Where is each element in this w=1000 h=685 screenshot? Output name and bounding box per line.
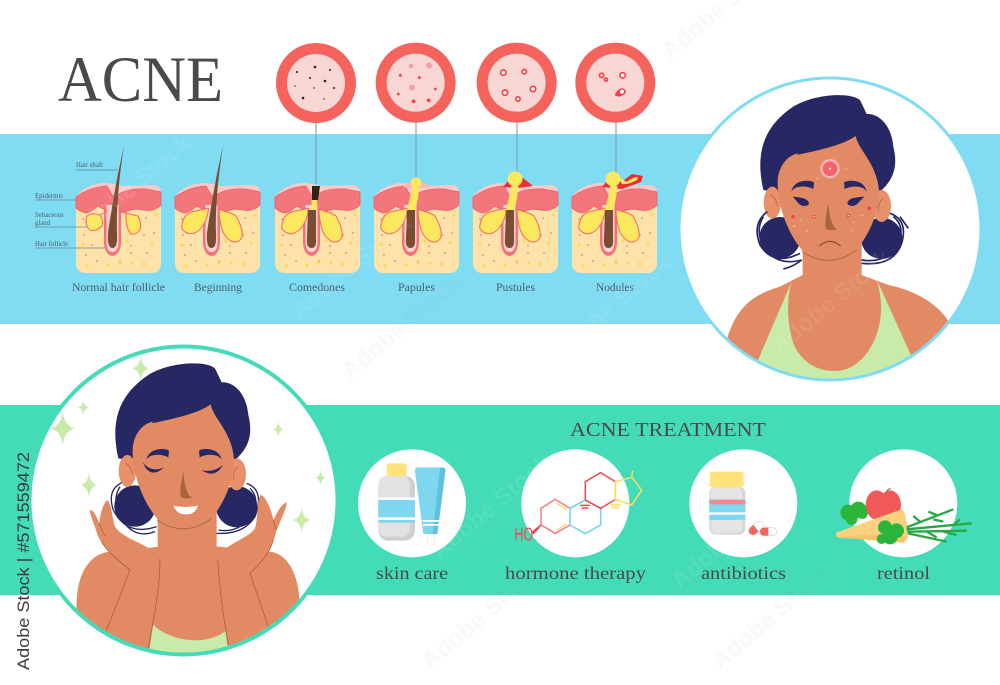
watermarks: Adobe Stock [427, 449, 557, 565]
stage labels [72, 282, 635, 294]
hands and arms [90, 495, 287, 660]
watermarks: Adobe Stock [667, 479, 797, 595]
title: ACNE [58, 44, 223, 116]
smile [173, 506, 198, 514]
treatment heading: ACNE TREATMENT [570, 419, 766, 441]
ring: top portrait [679, 78, 981, 380]
skin circle: pustules [477, 43, 557, 123]
treatment labels [376, 563, 930, 583]
follicle: normal hair follicle [76, 144, 161, 273]
stage labels: Papules [398, 282, 436, 294]
watermarks: Adobe Stock [547, 249, 677, 365]
stage labels: Pustules [496, 282, 536, 294]
treatment labels: skin care [376, 563, 448, 583]
watermarks: Adobe Stock [417, 559, 547, 675]
label lines and callouts: Hair follicle [35, 241, 68, 248]
icon: hormone molecule: HO [514, 524, 533, 545]
skin circle: comedones [276, 43, 356, 123]
treatment labels: antibiotics [701, 563, 786, 583]
treatment labels: hormone therapy [505, 563, 646, 583]
follicle: papules [374, 178, 459, 273]
label lines and callouts: Epidermis [35, 193, 63, 200]
mouth [819, 241, 841, 246]
treatment labels: retinol [877, 563, 930, 583]
watermarks: Adobe Stock [707, 559, 837, 675]
label lines and callouts: Hair shaft [76, 162, 103, 169]
background bands [0, 134, 1000, 595]
follicle: nodules [572, 172, 657, 273]
closed eyes [142, 462, 223, 474]
skin circle: nodules [575, 43, 655, 123]
watermarks: Adobe Stock [287, 209, 417, 325]
stage labels: Normal hair follicle [72, 282, 165, 294]
watermarks: Adobe Stock [67, 129, 197, 245]
eyes [793, 197, 864, 206]
icon: retinol foods [836, 449, 972, 557]
follicle: comedones [275, 183, 360, 273]
label lines and callouts [35, 162, 118, 248]
portrait: woman with acne [679, 79, 981, 390]
watermarks: Adobe Stock [767, 244, 897, 360]
pimples [791, 159, 871, 232]
stage labels: Comedones [289, 282, 346, 294]
stage labels: Nodules [596, 282, 635, 294]
label lines and callouts: gland [35, 220, 51, 227]
stock id vertical text: Adobe Stock | #571559472 [14, 452, 33, 670]
label lines and callouts: Sebaceous [35, 212, 64, 219]
stage labels: Beginning [194, 282, 242, 294]
follicle: pustules [473, 172, 558, 273]
icon: skin care [358, 449, 466, 557]
ring: bottom portrait [30, 346, 338, 654]
portrait: happy woman [29, 346, 337, 660]
connector lines [316, 120, 616, 184]
icon: antibiotics [689, 449, 797, 557]
skin circle: papules [376, 43, 456, 123]
icon: hormone molecule [514, 449, 642, 557]
follicle: beginning [175, 144, 260, 273]
sparkles [50, 356, 326, 533]
watermarks: Adobe Stock [337, 269, 467, 385]
